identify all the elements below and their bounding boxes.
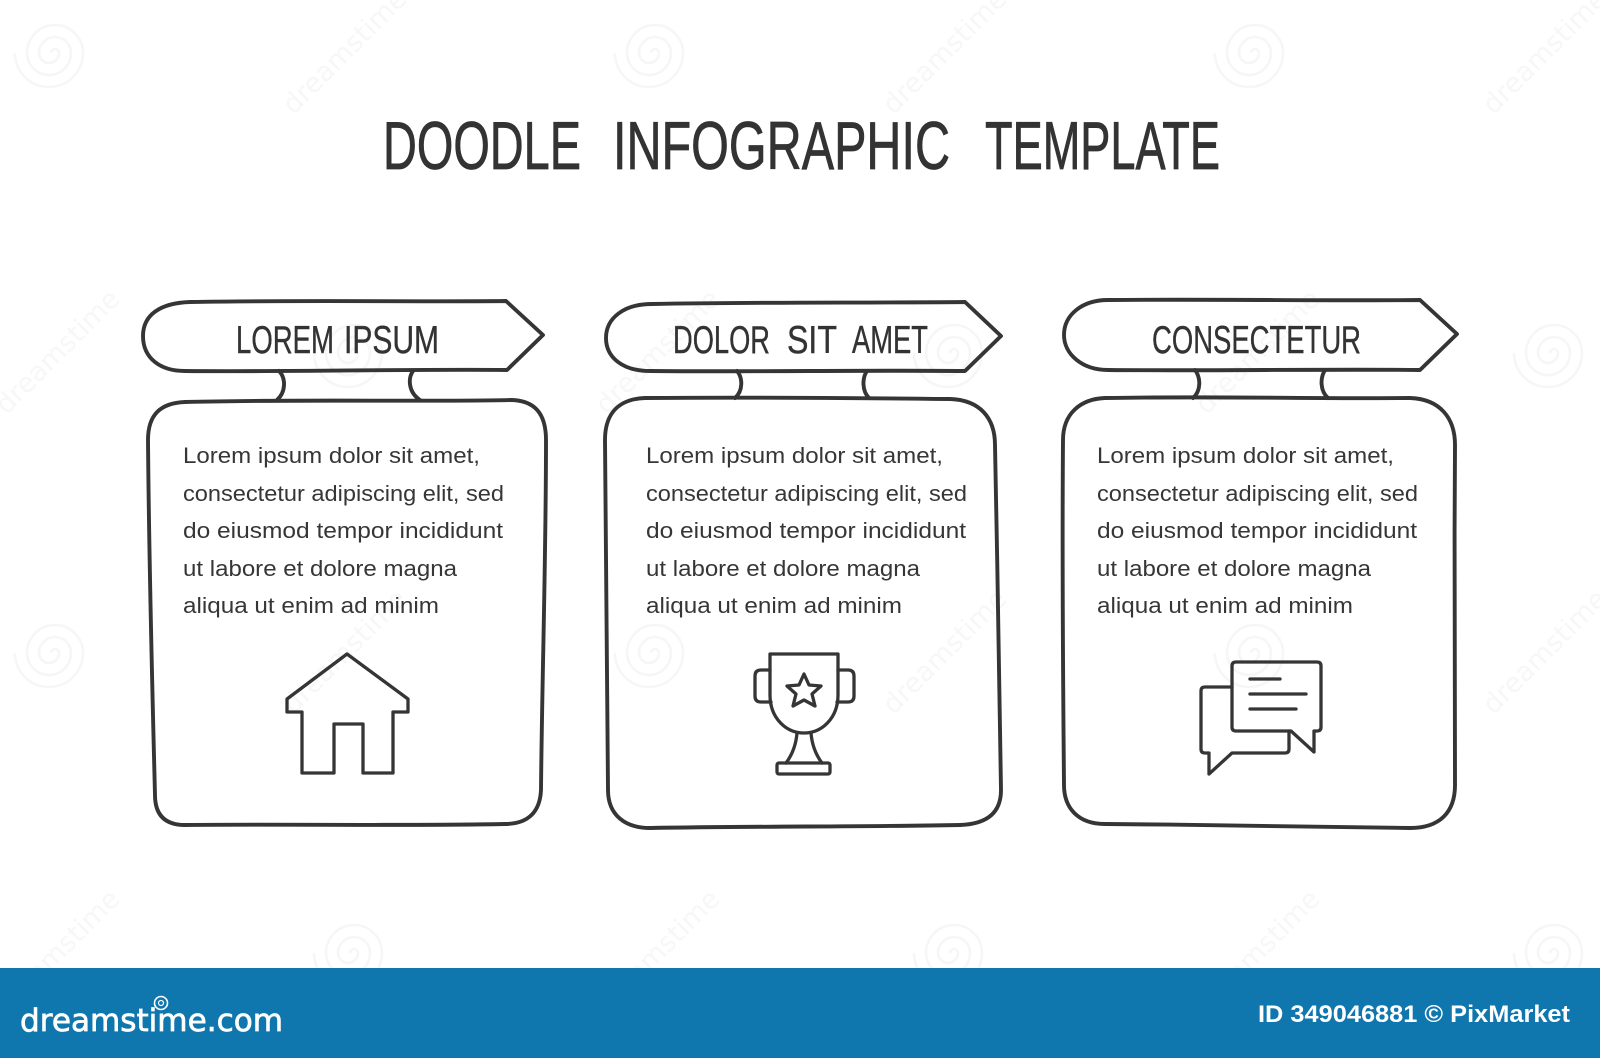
card outline: [148, 400, 546, 825]
body text: consectetur adipiscing elit, sed: [646, 481, 967, 506]
icon: trophy: [755, 654, 854, 774]
card outline: [605, 398, 1001, 828]
body text: do eiusmod tempor incididunt: [646, 518, 967, 543]
banner arrow: [606, 302, 1001, 371]
image id credit: ID 349046881 © PixMarket: [1258, 1001, 1570, 1028]
card outline: [1063, 397, 1455, 828]
body text: consectetur adipiscing elit, sed: [1097, 481, 1418, 506]
body text: Lorem ipsum dolor sit amet,: [183, 443, 480, 468]
connectors: [1193, 370, 1328, 398]
body text: [183, 443, 504, 618]
body text: aliqua ut enim ad minim: [1097, 593, 1353, 618]
panel: lorem ipsum: [143, 301, 546, 825]
body text: [1097, 443, 1418, 618]
footer bar: [0, 968, 1600, 1058]
body text: do eiusmod tempor incididunt: [1097, 518, 1418, 543]
banner label: SIT: [787, 319, 837, 362]
banner label: [236, 319, 439, 362]
banner label: LOREM: [236, 319, 334, 362]
panel: consectetur: [1063, 300, 1457, 828]
connectors: [277, 371, 420, 400]
body text: do eiusmod tempor incididunt: [183, 518, 504, 543]
body text: aliqua ut enim ad minim: [183, 593, 439, 618]
banner arrow: [1064, 300, 1457, 370]
title: TEMPLATE: [985, 108, 1220, 184]
body text: consectetur adipiscing elit, sed: [183, 481, 504, 506]
icon: chat bubbles: [1201, 662, 1321, 774]
banner label: CONSECTETUR: [1152, 319, 1361, 362]
banner label: [673, 319, 928, 362]
watermark: background spirals and wordmarks: dreamstime: [590, 884, 726, 1020]
icon: house: [287, 654, 408, 773]
banner label: DOLOR: [673, 319, 770, 362]
body text: ut labore et dolore magna: [646, 556, 921, 581]
connectors: [735, 371, 869, 398]
body text: Lorem ipsum dolor sit amet,: [646, 443, 943, 468]
logo: dreamstime: dreamstime.com: [20, 1003, 283, 1039]
banner label: AMET: [852, 319, 928, 362]
title: INFOGRAPHIC: [613, 108, 950, 184]
body text: ut labore et dolore magna: [1097, 556, 1372, 581]
body text: ut labore et dolore magna: [183, 556, 458, 581]
banner arrow: [143, 301, 543, 371]
body text: aliqua ut enim ad minim: [646, 593, 902, 618]
body text: Lorem ipsum dolor sit amet,: [1097, 443, 1394, 468]
banner label: IPSUM: [344, 319, 439, 362]
watermark: background spirals and wordmarks: dreamstime: [277, 584, 413, 720]
watermark: background spirals and wordmarks: dreamstime: [1190, 284, 1326, 420]
watermark: background spirals and wordmarks: dreamstime: [1190, 884, 1326, 1020]
title: [383, 108, 1220, 184]
panel: dolor sit amet: [605, 302, 1001, 828]
body text: [646, 443, 967, 618]
watermark: background spirals and wordmarks: dreamstime: [590, 284, 726, 420]
title: DOODLE: [383, 108, 581, 184]
watermark: background spirals and wordmarks: dreamstime: [877, 584, 1013, 720]
